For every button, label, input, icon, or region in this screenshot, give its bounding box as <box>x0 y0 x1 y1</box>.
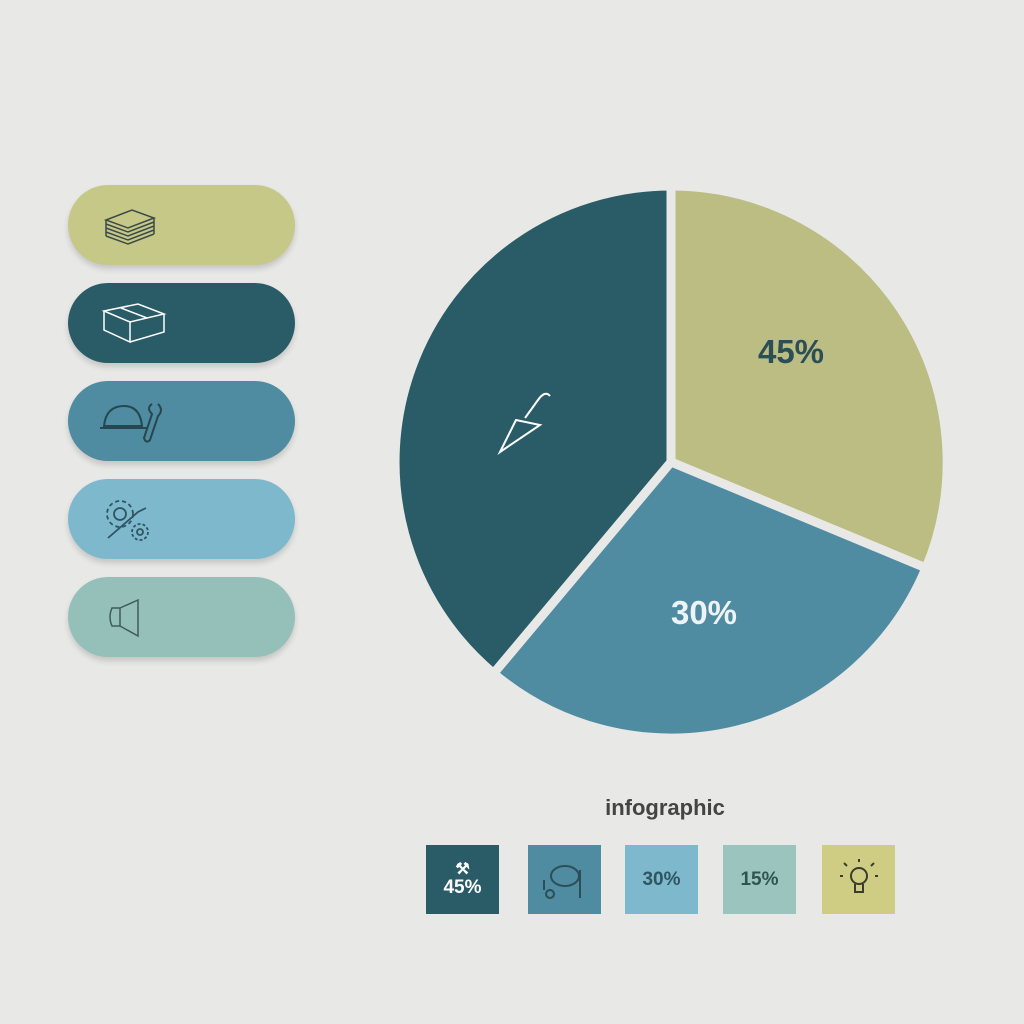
legend title: infographic <box>605 795 725 820</box>
legend 1 <box>426 845 499 914</box>
legend 1: 45% <box>443 877 482 898</box>
pill 5 <box>68 577 295 657</box>
pill 1 <box>68 185 295 265</box>
legend 4 <box>723 845 796 914</box>
pill 2 <box>68 283 295 363</box>
pill 4 <box>68 479 295 559</box>
panel: pill list <box>66 185 297 663</box>
slice: dark <box>395 186 671 673</box>
legend 2 <box>528 845 601 914</box>
legend 1: ⚒ <box>455 861 470 878</box>
legend <box>426 845 895 914</box>
legend 3: 30% <box>642 868 681 890</box>
legend 4: 15% <box>740 868 779 890</box>
slice: olive 45% <box>671 186 947 568</box>
legend 5 <box>822 845 895 914</box>
pill 3 <box>68 381 295 461</box>
icon: trowel <box>500 394 550 452</box>
label 30%: 30% <box>671 594 737 631</box>
label 45%: 45% <box>758 333 824 370</box>
legend 3 <box>625 845 698 914</box>
slice: blue 30% <box>494 462 926 738</box>
